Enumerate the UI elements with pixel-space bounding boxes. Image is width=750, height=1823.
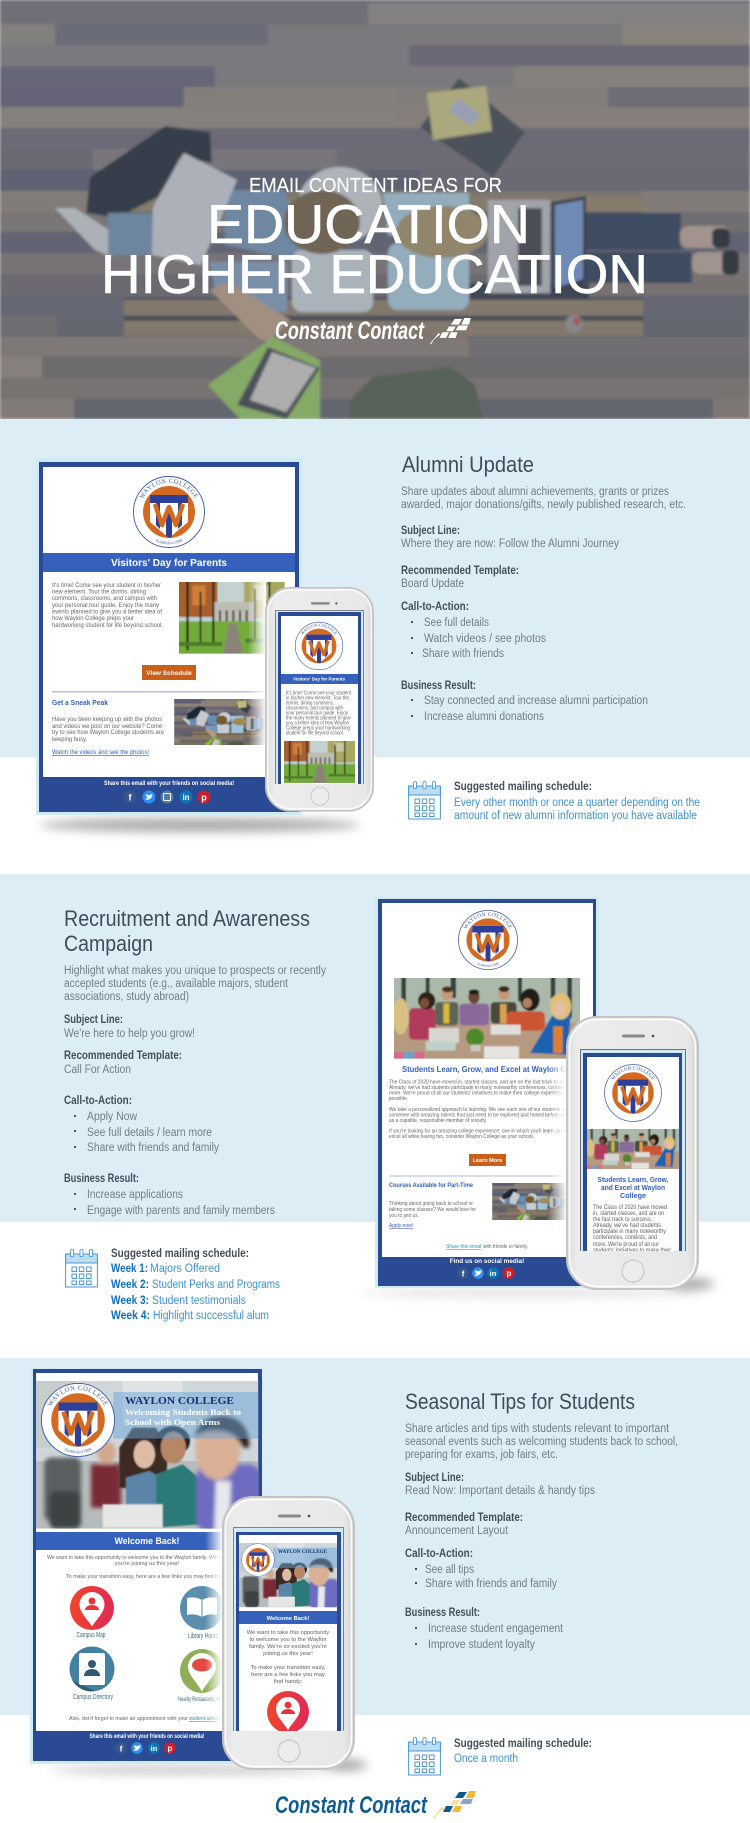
- icon: campus directory: Campus Directory: [73, 1694, 113, 1701]
- alumni business result: Stay connected and increase alumni participation: [424, 695, 648, 707]
- schedule text: [454, 1738, 592, 1765]
- recruitment template: Call For Action: [64, 1064, 131, 1076]
- alumni template: Recommended Template:: [401, 565, 519, 577]
- sneak peak article: by to see how Waylon College students are: [52, 729, 164, 736]
- desk photo: [492, 1183, 566, 1220]
- section: alumni update: [0, 419, 750, 838]
- recruitment business result: Business Result:: [64, 1173, 139, 1185]
- icon: campus directory: [70, 1646, 114, 1701]
- phone mockup: We want to take this opportunity: [247, 1630, 329, 1636]
- alumni call to action: Share with friends: [422, 648, 504, 660]
- email mockup: [30, 1368, 262, 1764]
- college crest: [133, 476, 205, 548]
- college crest: Established 1889: [156, 539, 182, 544]
- part-time article: taking some classes? We would love for: [389, 1207, 476, 1213]
- seasonal business result: Increase student engagement: [428, 1623, 564, 1635]
- view schedule button: [142, 665, 196, 680]
- email body: Already, we've had students participate in many noteworthy conferences, contest: [389, 1085, 564, 1091]
- schedule text: Every other month or once a quarter depending on the: [454, 797, 700, 809]
- email mockup: [36, 458, 302, 815]
- alumni business result: Business Result:: [401, 680, 476, 692]
- email footer: p: [168, 1744, 173, 1753]
- recruitment template: Recommended Template:: [64, 1050, 182, 1062]
- icon: nearby restaurants: Nearby Restaurants/ Hotels: [178, 1697, 228, 1703]
- phone mockup: students' initiatives to make their: [593, 1247, 671, 1254]
- learn more button: [469, 1154, 506, 1166]
- hero banner: [0, 0, 750, 419]
- email footer: in: [151, 1744, 158, 1753]
- advisor note: student advisor.: [189, 1716, 223, 1722]
- college crest: WAYLON COLLEGE: [463, 912, 512, 929]
- hero heading: [101, 174, 648, 305]
- seasonal business result: Improve student loyalty: [428, 1639, 535, 1651]
- alumni call to action: See full details: [424, 617, 489, 629]
- schedule text: Suggested mailing schedule:: [454, 781, 592, 793]
- weekly schedule: Majors Offered: [150, 1263, 220, 1275]
- seasonal heading: Seasonal Tips for Students: [405, 1389, 635, 1414]
- phone shadow: [323, 1759, 367, 1771]
- schedule text: [454, 781, 700, 822]
- email footer: [450, 1258, 524, 1279]
- phone mockup: College preps your hardworking: [286, 726, 350, 732]
- sneak peak article: Watch the videos and see the photos!: [52, 749, 149, 756]
- phone mockup: dorms, dining commons,: [286, 700, 334, 706]
- icon: library hours: Library Hours: [188, 1633, 218, 1640]
- hero heading: EDUCATION: [207, 193, 530, 255]
- email footer: in: [182, 793, 190, 802]
- seasonal description: preparing for exams, job fairs, etc.: [405, 1449, 558, 1461]
- email body: The Class of 2020 have moved in, started classes, and are on the fast track to suc: [389, 1080, 567, 1086]
- phone mockup: participate in many noteworthy: [593, 1228, 667, 1235]
- email footer: p: [507, 1269, 512, 1278]
- welcome text: To make your transition easy, here are a few links you may find handy:: [66, 1574, 231, 1580]
- recruitment description: Highlight what makes you unique to prospects or recently: [64, 965, 326, 977]
- welcome text: We want to take this opportunity to welcome you to the Waylon family. We're so excited: [47, 1555, 247, 1561]
- welcome band: Welcome Back!: [114, 1536, 180, 1546]
- share line: with friends or family.: [482, 1244, 528, 1250]
- alumni update heading: Alumni Update: [402, 452, 534, 477]
- shade beside phone: [248, 575, 266, 777]
- icon: nearby restaurants: [178, 1649, 228, 1703]
- college crest: Established 1889: [64, 1448, 92, 1454]
- recruitment description: [64, 965, 326, 1003]
- shade beside phone: [205, 1532, 223, 1731]
- email footer: f: [120, 1744, 123, 1754]
- seasonal template: Announcement Layout: [405, 1525, 509, 1537]
- email footer: Find us on social media!: [450, 1258, 524, 1265]
- recruitment call to action: See full details / learn more: [87, 1127, 212, 1139]
- recruitment description: associations, study abroad): [64, 991, 189, 1003]
- share line: Share this email: [446, 1244, 481, 1250]
- recruitment description: accepted students (e.g., available majors, student: [64, 978, 289, 990]
- alumni update description: awarded, major donations/gifts, newly published research, etc.: [401, 499, 686, 511]
- recruitment heading: Campaign: [64, 931, 153, 956]
- hero heading: HIGHER EDUCATION: [101, 243, 648, 305]
- weekly schedule: Suggested mailing schedule:: [111, 1248, 249, 1260]
- email banner: [43, 553, 295, 572]
- alumni template: Board Update: [401, 578, 464, 590]
- alumni subject line: Where they are now: Follow the Alumni Journey: [401, 538, 619, 550]
- phone mockup: [566, 1016, 699, 1290]
- recruitment subject line: [64, 1014, 195, 1040]
- phone crest: WAYLON COLLEGE: [610, 1066, 655, 1080]
- recruitment heading: Recruitment and Awareness: [64, 906, 310, 931]
- sneak peak article: and videos we post on our website? Come: [52, 723, 162, 730]
- seasonal template: [405, 1512, 523, 1537]
- weekly schedule: Week 2:: [111, 1279, 149, 1291]
- mailing schedule: alumni: [409, 781, 700, 822]
- phone mockup: in his/her new element. Tour the: [286, 696, 349, 702]
- recruitment call to action: Apply Now: [87, 1111, 138, 1123]
- alumni update description: [401, 486, 686, 511]
- seasonal call to action: See all tips: [425, 1564, 474, 1576]
- email body: If you're looking for an amazing college experience, one in which you'll learn, grow: [389, 1128, 568, 1134]
- phone crest: [604, 1064, 662, 1122]
- email body: as a capable, responsible member of society.: [389, 1118, 487, 1124]
- email shadow: [40, 818, 360, 832]
- email heading: Students Learn, Grow, and Excel at Waylon College: [402, 1064, 588, 1074]
- phone mockup: classrooms, and campus with: [286, 706, 343, 712]
- section background: [0, 1358, 750, 1715]
- phone mockup: joining us this year!: [262, 1651, 313, 1657]
- alumni update description: Share updates about alumni achievements, grants or prizes: [401, 486, 669, 498]
- email intro text: events planned to give you a better idea of: [52, 608, 162, 616]
- view schedule button: View Schedule: [146, 670, 192, 677]
- recruitment business result: Engage with parents and family members: [87, 1205, 275, 1217]
- phone crest: WAYLON COLLEGE: [300, 624, 338, 635]
- phone mockup: here are a few links you may: [251, 1672, 325, 1678]
- phone mockup: Visitors' Day for Parents: [293, 676, 345, 682]
- recruitment business result: [64, 1173, 275, 1217]
- weekly schedule: Week 1:: [111, 1263, 148, 1275]
- phone mockup: the many events planned to give: [286, 716, 351, 722]
- alumni call to action: Call-to-Action:: [401, 601, 469, 613]
- hero Constant Contact logo: Constant Contact: [275, 317, 425, 345]
- email body: [389, 1080, 568, 1140]
- college crest: [41, 1383, 115, 1457]
- alumni call to action: [401, 601, 546, 660]
- recruitment template: [64, 1050, 182, 1076]
- email intro text: hardworking student for life beyond school.: [52, 622, 163, 629]
- section background: [0, 874, 750, 1222]
- part-time article: Thinking about going back to school or: [389, 1201, 473, 1207]
- phone mockup: to welcome you to the Waylon: [249, 1637, 327, 1643]
- email intro text: commons, classrooms, and campus with: [52, 595, 157, 602]
- phone shadow: [666, 1278, 714, 1290]
- schedule text: amount of new alumni information you have available: [454, 810, 697, 822]
- sneak peak article: Get a Sneak Peak: [52, 700, 108, 707]
- college crest: WAYLON COLLEGE: [139, 478, 198, 498]
- phone mockup: It's time! Come see your student: [286, 690, 351, 696]
- email body: We take a personalized approach to learning. We see each one of our students as: [389, 1107, 567, 1113]
- phone mockup: The Class of 2020 have moved: [593, 1204, 667, 1211]
- calendar icon: [66, 1250, 97, 1287]
- seasonal business result: [405, 1607, 564, 1651]
- phone mockup: student for life beyond school.: [286, 730, 344, 736]
- phone mockup: Students Learn, Grow,: [598, 1175, 668, 1184]
- phone mockup: find handy:: [274, 1679, 303, 1685]
- email body: more. We're proud of all our students' initiatives to make their college experience: [389, 1090, 565, 1096]
- email footer: f: [128, 792, 132, 802]
- seasonal subject line: [405, 1472, 595, 1497]
- recruitment business result: Increase applications: [87, 1189, 183, 1201]
- weekly schedule: Week 3:: [111, 1295, 149, 1307]
- icon: campus map: [70, 1586, 114, 1639]
- hero colour wash: [0, 0, 750, 419]
- share line: [446, 1244, 528, 1250]
- welcome band: [36, 1532, 258, 1550]
- seasonal business result: Business Result:: [405, 1607, 480, 1619]
- section background: [0, 419, 750, 757]
- campus photo: [176, 579, 289, 657]
- alumni subject line: Subject Line:: [401, 525, 460, 537]
- phone mockup: Welcome Back!: [267, 1616, 309, 1622]
- phone mockup: College: [620, 1191, 646, 1200]
- college crest: [458, 910, 518, 970]
- seasonal description: Share articles and tips with students relevant to important: [405, 1423, 670, 1435]
- college crest: Established 1889: [477, 962, 499, 967]
- mailing schedule: recruitment: [66, 1248, 280, 1322]
- hero photo: students on a bench: [0, 0, 750, 419]
- phone mockup: Already, we've had students: [593, 1222, 661, 1229]
- recruitment call to action: [64, 1095, 219, 1154]
- phone mockup: family. We're so excited you're: [249, 1644, 327, 1650]
- recruitment call to action: Call-to-Action:: [64, 1095, 132, 1107]
- seasonal subject line: Subject Line:: [405, 1472, 464, 1484]
- email shadow: [360, 1290, 700, 1296]
- photo headline: WAYLON COLLEGE: [125, 1396, 234, 1407]
- seasonal call to action: [405, 1548, 557, 1590]
- phone mockup: your personal tour guide. Enjoy: [286, 710, 348, 716]
- calendar icon: [409, 782, 440, 819]
- photo headline: [125, 1396, 241, 1427]
- seasonal template: Recommended Template:: [405, 1512, 523, 1524]
- seasonal description: seasonal events such as welcoming students back to school,: [405, 1436, 678, 1448]
- sneak peak article: Have you been keeping up with the photos: [52, 716, 163, 723]
- email body: possible.: [389, 1096, 408, 1102]
- weekly schedule: Week 4:: [111, 1310, 150, 1322]
- alumni call to action: Watch videos / see photos: [424, 633, 546, 645]
- section: recruitment and awareness: [0, 874, 750, 1322]
- email intro text: It's time! Come see your student in his/her: [52, 582, 162, 589]
- hero heading: EMAIL CONTENT IDEAS FOR: [249, 174, 502, 197]
- recruitment subject line: Subject Line:: [64, 1014, 123, 1026]
- icon: campus map: Campus Map: [76, 1632, 106, 1639]
- phone mockup: and Excel at Waylon: [601, 1183, 665, 1192]
- email body: excel all while having fun, consider Waylon College as your school.: [389, 1134, 534, 1140]
- desk photo: [174, 699, 265, 745]
- email footer: in: [490, 1269, 497, 1278]
- phone mockup: WAYLON COLLEGE: [278, 1550, 328, 1555]
- alumni subject line: [401, 525, 619, 550]
- phone crest: [294, 622, 344, 670]
- recruitment heading: [64, 906, 310, 956]
- email intro text: new element. Tour the dorms, dining: [52, 588, 146, 596]
- welcome text: you're joining us this year!: [115, 1561, 180, 1567]
- phone mockup: the fast track to success.: [593, 1216, 652, 1223]
- icon: library hours: [180, 1586, 224, 1640]
- schedule text: Suggested mailing schedule:: [454, 1738, 592, 1750]
- photo headline: Welcoming Students Back to: [125, 1408, 241, 1417]
- advisor note: Also, don't forget to make an appointment with your: [69, 1716, 188, 1722]
- college crest: WAYLON COLLEGE: [47, 1386, 108, 1406]
- email banner: Visitors' Day for Parents: [111, 558, 227, 569]
- part-time article: [389, 1183, 476, 1229]
- phone mockup: To make your transition easy,: [251, 1665, 326, 1671]
- weekly schedule: Student testimonials: [152, 1295, 246, 1307]
- weekly schedule: [111, 1248, 280, 1322]
- email intro text: [52, 582, 163, 629]
- mailing schedule: seasonal: [409, 1738, 592, 1775]
- recruitment subject line: We're here to help you grow!: [64, 1028, 195, 1040]
- email footer: Share this email with your friends on social media!: [90, 1733, 204, 1740]
- alumni business result: Increase alumni donations: [424, 711, 544, 723]
- sneak peak article: [52, 700, 164, 756]
- alumni template: [401, 565, 519, 590]
- shade beside phone: [548, 1060, 567, 1257]
- email footer: Share this email with your friends on social media!: [104, 780, 234, 787]
- phone mockup: you a better idea of how Waylon: [286, 720, 349, 726]
- part-time article: Courses Available for Part-Time: [389, 1183, 474, 1189]
- footer Constant Contact logo: Constant Contact: [275, 1792, 428, 1819]
- email footer: p: [201, 792, 207, 802]
- calendar icon: [409, 1738, 440, 1775]
- email mockup: [375, 897, 599, 1288]
- seasonal call to action: Share with friends and family: [425, 1578, 557, 1590]
- email intro text: how Waylon College preps your: [52, 615, 135, 622]
- phone crest: [242, 1544, 274, 1576]
- part-time article: Apply now!: [389, 1223, 413, 1229]
- learn more button: Learn More: [473, 1158, 502, 1164]
- sneak peak article: keeping busy.: [52, 736, 87, 743]
- phone mockup: conferences, contests, and: [593, 1234, 657, 1241]
- alumni business result: [401, 680, 648, 723]
- email footer: [90, 1733, 204, 1754]
- weekly schedule: Student Perks and Programs: [152, 1279, 280, 1291]
- phone mockup: in, started classes, and are on: [593, 1210, 664, 1217]
- group photo: [391, 975, 583, 1062]
- seasonal subject line: Read Now: Important details & handy tips: [405, 1485, 595, 1497]
- part-time article: you to join us.: [389, 1213, 419, 1219]
- photo headline: School with Open Arms: [125, 1418, 220, 1427]
- email footer: f: [462, 1268, 465, 1278]
- seasonal call to action: Call-to-Action:: [405, 1548, 473, 1560]
- seasonal description: [405, 1423, 678, 1461]
- classroom photo: [36, 1381, 262, 1532]
- schedule text: Once a month: [454, 1753, 518, 1765]
- email body: someone with amazing talents that just need to be explored and honed before sta: [389, 1112, 568, 1118]
- recruitment call to action: Share with friends and family: [87, 1142, 219, 1154]
- weekly schedule: Highlight successful alum: [153, 1310, 269, 1322]
- email intro text: your personal tour guide. Enjoy the many: [52, 602, 160, 609]
- phone mockup: [265, 587, 374, 812]
- phone mockup: [223, 1497, 354, 1769]
- email footer: [104, 780, 234, 804]
- section: seasonal tips: [0, 1358, 750, 1780]
- welcome text: [47, 1555, 247, 1580]
- email shadow: [50, 1766, 330, 1774]
- phone mockup: more. We're proud of all our: [593, 1241, 659, 1248]
